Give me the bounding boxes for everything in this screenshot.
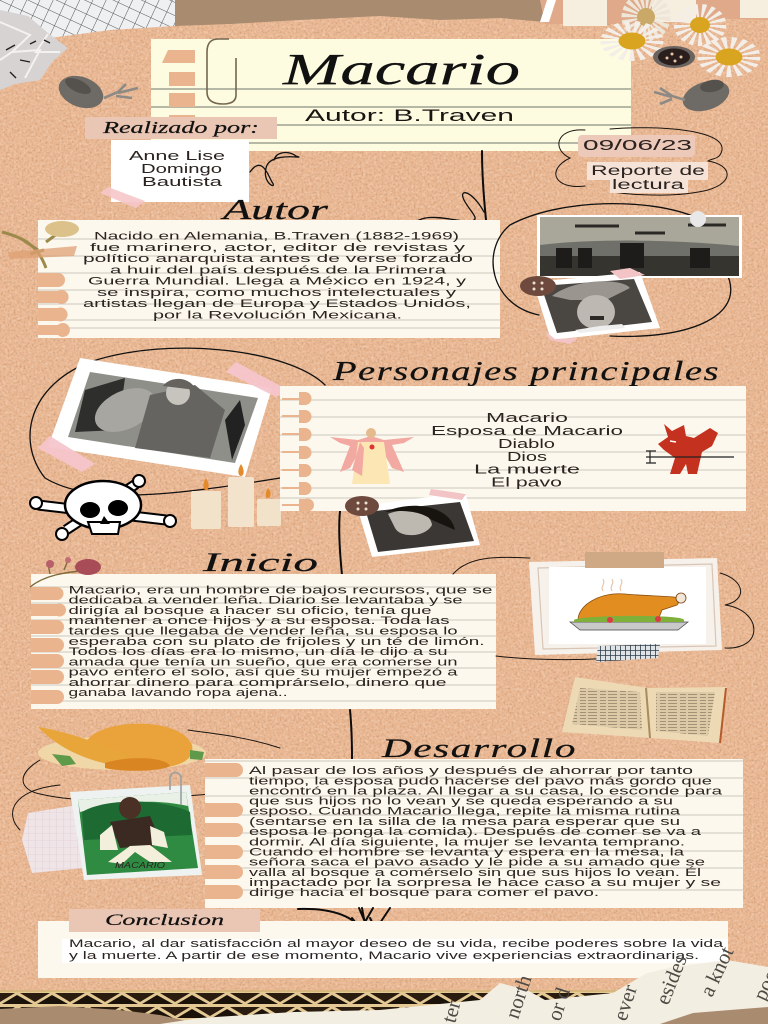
date and report labels: lectura <box>612 177 685 192</box>
panel: Inicio <box>31 574 496 709</box>
panel: Desarrollo: esposa le ponga la comida). Después de comer se va a <box>249 826 702 838</box>
photo: Macario drawing: MACARIO <box>115 861 165 870</box>
icon: skull and bones <box>30 475 176 540</box>
framed turkey <box>453 552 754 662</box>
brown paper <box>175 0 545 26</box>
panel: Desarrollo: que sus hijos no lo vean y se queda esperando a su <box>249 796 673 808</box>
footer collage: a knot <box>695 943 739 1000</box>
panel: Conclusion: y la muerte. A partir de ese momento, Macario vive experiencias extraordinarias. <box>69 950 699 962</box>
footer collage: esides <box>650 951 692 1008</box>
panel: Inicio: Todos los días era lo mismo, un día le dijo a su <box>68 646 448 658</box>
daisies and button <box>612 1 748 69</box>
panel: Personajes: Dios <box>507 449 548 464</box>
panel: Autor: político anarquista antes de verse forzado <box>83 253 473 265</box>
panel: Inicio: dedicaba a vender leña. Diario se levantaba y se <box>68 595 462 607</box>
panel: Conclusion: Macario, al dar satisfacción al mayor deseo de su vida, recibe poderes sobre la vida <box>69 938 724 950</box>
title text: Macario <box>281 45 520 94</box>
photo group: author <box>493 204 742 344</box>
note: author of report: Domingo <box>141 161 222 176</box>
dried flower sprig <box>30 557 101 587</box>
footer collage: ever <box>608 982 642 1024</box>
realizado tag <box>85 117 277 139</box>
heading: Personajes principales: Personajes principales <box>332 356 720 386</box>
realizado tag: Realizado por: <box>101 118 259 137</box>
moth right <box>654 75 733 117</box>
panel: Desarrollo <box>205 759 743 908</box>
brown torn paper <box>0 1006 200 1024</box>
daisy 2 <box>612 29 652 53</box>
panel: Desarrollo: señora saca el pavo asado y le pide a su amado que se <box>249 857 705 869</box>
striped paper <box>540 0 768 24</box>
heading: Autor: Autor <box>220 195 328 226</box>
photo: small portrait <box>345 489 480 557</box>
curve outline <box>453 557 754 660</box>
pin <box>690 211 706 227</box>
panel: Inicio: esperaba con su plato de frijoles y un té de limón. <box>68 636 484 648</box>
note: author of report <box>100 140 249 208</box>
report tag <box>587 162 708 193</box>
conclusion tag: Conclusion <box>105 912 224 929</box>
note: author of report: Bautista <box>142 174 223 189</box>
panel: Inicio: mantener a once hijos y a su esposa. Toda las <box>68 615 450 627</box>
panel: Inicio: pavo entero el solo, así que su mujer empezó a <box>68 666 459 678</box>
footer collage: or d <box>542 984 575 1024</box>
panel: Autor: Nacido en Alemania, B.Traven (1882-1969) <box>94 230 459 242</box>
panel: Inicio: tardes que llegaba de vender leña, su esposa lo <box>68 626 458 638</box>
photo: man with hat <box>533 272 660 340</box>
panel: Desarrollo: valla al bosque a comérselo sin que sus hijos lo vean. Él <box>249 866 701 879</box>
panel: Desarrollo: impactado por la sorpresa le hace caso a su mujer y se <box>249 877 721 889</box>
panel: Autor <box>38 220 500 338</box>
panel: Personajes: El pavo <box>491 474 562 490</box>
top torn strip <box>0 0 768 38</box>
tape <box>429 489 466 500</box>
washi tapes <box>610 268 645 279</box>
date and report labels <box>556 128 727 195</box>
panel: Desarrollo: (sentarse en la silla de la mesa para esperar que su <box>249 816 680 828</box>
panel: Personajes: Esposa de Macario <box>431 423 623 438</box>
panel: Desarrollo: tiempo, la esposa pudo hacerse del pavo más gordo que <box>249 776 712 788</box>
photo frame <box>48 358 272 477</box>
panel: Autor: por la Revolución Mexicana. <box>153 310 402 322</box>
conclusion arrows <box>298 908 390 930</box>
author line: Autor: B.Traven <box>305 106 514 125</box>
heading: Inicio: Inicio <box>201 548 318 577</box>
panel: Personajes: Macario <box>486 410 568 425</box>
daisy 4 <box>710 45 748 69</box>
circle outline <box>493 204 731 336</box>
arrow to author panel <box>401 193 484 230</box>
panel: Personajes <box>280 386 746 512</box>
panel: Personajes: Diablo <box>498 436 555 451</box>
panel: Desarrollo: dormir. Al día siguiente, la mujer se levanta temprano. <box>249 836 685 848</box>
heading: Desarrollo: Desarrollo <box>380 734 577 763</box>
moth left <box>54 70 138 114</box>
sprig with tape <box>2 221 79 268</box>
washi tape <box>100 187 145 208</box>
photo group: woman <box>30 348 325 495</box>
icon: paperclip <box>170 772 181 805</box>
curves behind Desarrollo panel <box>13 730 280 830</box>
panel: Inicio: dirigía al bosque a hacer su oficio, tenía que <box>68 605 432 617</box>
note: author of report: Anne Lise <box>129 148 225 163</box>
photo: Macario drawing <box>70 772 202 880</box>
panel: Inicio: Macario, era un hombre de bajos recursos, que se <box>68 584 492 596</box>
panel: Desarrollo: encontró en la plaza. Al llegar a su casa, lo esconde para <box>249 786 723 798</box>
binder holes <box>162 50 195 125</box>
checkered tape <box>596 644 660 662</box>
conclusion tag <box>69 909 260 932</box>
crumpled paper <box>0 10 68 90</box>
panel: Autor: fue marinero, actor, editor de revistas y <box>90 242 466 254</box>
swirl near note <box>250 153 299 186</box>
footer collage <box>0 942 768 1024</box>
panel: Personajes: La muerte <box>474 462 580 476</box>
icon: candles <box>191 464 281 529</box>
cloud outline <box>556 128 727 195</box>
turkey drawing <box>570 579 688 630</box>
open book <box>562 677 727 743</box>
date and report labels: Reporte de <box>591 163 705 178</box>
panel: Desarrollo: esposo. Cuando Macario llega, repite la misma rutina <box>249 806 681 818</box>
news words: north <box>500 971 537 1022</box>
frame <box>529 558 722 655</box>
panel: Autor: artistas llegan de Europa y Estados Unidos, <box>83 298 471 310</box>
icon: button <box>520 276 556 296</box>
icon: devil <box>646 424 734 474</box>
panel: Autor: Guerra Mundial. Llega a México en 1924, y <box>88 276 467 288</box>
daisy 3 <box>684 12 716 38</box>
date tag <box>578 135 695 157</box>
icon: Jesus figure <box>330 428 414 484</box>
photo: war planes <box>537 215 742 278</box>
title card <box>151 39 631 151</box>
panel: Inicio: ganaba lavando ropa ajena.. <box>68 687 288 699</box>
panel: Autor: se inspira, como muchos intelectuales y <box>97 287 457 299</box>
panel: Autor: a huir del país después de la Primera <box>110 264 448 276</box>
panel: Inicio: ahorrar dinero para comprárselo, dinero que <box>68 677 446 689</box>
grid paper <box>0 0 175 38</box>
timeline connectors <box>250 151 486 760</box>
cardboard <box>0 992 768 1024</box>
panel: Desarrollo: dirige hacia el bosque para comer el pavo. <box>249 887 599 899</box>
roast turkey <box>38 724 206 771</box>
tape <box>585 552 664 568</box>
panel: Desarrollo: Al pasar de los años y después de ahorrar por tanto <box>249 765 693 777</box>
panel: Conclusion <box>38 921 728 978</box>
icon: button <box>345 496 379 516</box>
newspaper <box>160 960 768 1024</box>
icon: paperclip <box>207 39 236 104</box>
circle outline <box>30 348 325 495</box>
date and report labels: 09/06/23 <box>583 137 692 154</box>
pink graph paper <box>22 805 84 873</box>
tapes <box>226 362 288 397</box>
daisy 1 <box>630 1 662 33</box>
panel: Desarrollo: Cuando el hombre se levanta y espera en la mesa, la <box>249 846 685 858</box>
panel: Inicio: amada que tenía un sueño, que era comerse un <box>68 656 458 668</box>
icon: button <box>653 46 695 68</box>
